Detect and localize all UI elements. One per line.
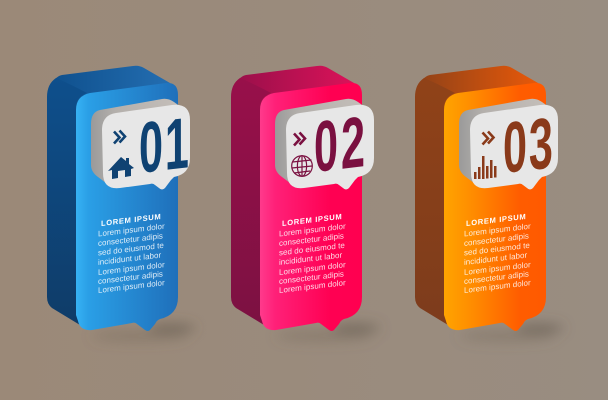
floor shadow (460, 323, 564, 342)
body text: consectetur adipis (464, 231, 529, 248)
body text: Lorem ipsum dolor (98, 260, 165, 277)
body text: Lorem ipsum dolor (279, 222, 346, 238)
body text: Lorem ipsum dolor (279, 260, 346, 277)
icon: chevrons (482, 132, 494, 144)
icon: house (108, 157, 134, 179)
body text: Lorem ipsum dolor (464, 222, 531, 238)
floor shadow (92, 323, 196, 342)
body text: incididunt ut labor (279, 251, 342, 267)
panel: step 01 (47, 66, 196, 342)
body text: sed do eiusmod te (98, 241, 164, 257)
top face (234, 66, 363, 120)
icon: chevrons (294, 132, 305, 146)
body text: consectetur adipis (98, 231, 163, 248)
front face (76, 83, 178, 331)
number: 02 (314, 100, 368, 188)
callout depth (459, 99, 556, 186)
front face (444, 83, 546, 331)
body text (98, 222, 165, 295)
body text: consectetur adipis (98, 269, 163, 286)
body text: Lorem ipsum dolor (464, 278, 531, 295)
panel: step 02 (231, 66, 380, 342)
callout face (102, 105, 190, 190)
body text: incididunt ut labor (98, 251, 161, 267)
front face (260, 83, 362, 331)
body text: Lorem ipsum dolor (98, 278, 165, 295)
body text: Lorem ipsum dolor (464, 260, 531, 277)
body text: Lorem ipsum dolor (98, 222, 165, 238)
number: 03 (503, 102, 555, 189)
icon: chevrons (114, 130, 125, 144)
callout depth (91, 99, 188, 186)
icon: bar chart (474, 156, 496, 179)
floor shadow (276, 323, 380, 342)
heading: LOREM IPSUM (282, 212, 342, 228)
top face (50, 66, 179, 120)
side face (415, 78, 455, 325)
side face (47, 78, 87, 325)
number: 01 (139, 102, 191, 189)
body text: incididunt ut labor (464, 251, 527, 267)
callout depth (275, 99, 372, 186)
body text: consectetur adipis (464, 269, 529, 286)
heading: LOREM IPSUM (466, 212, 526, 228)
panel: step 03 (415, 66, 564, 342)
body text: Lorem ipsum dolor (279, 278, 346, 295)
icon: globe (292, 156, 312, 176)
body text: consectetur adipis (279, 231, 344, 248)
callout face (470, 105, 558, 190)
heading: LOREM IPSUM (101, 212, 161, 228)
side face (231, 78, 271, 325)
body text: sed do eiusmod te (464, 241, 530, 257)
body text: consectetur adipis (279, 269, 344, 286)
body text: sed do eiusmod te (279, 241, 345, 257)
body text (279, 222, 346, 295)
body text (464, 222, 531, 295)
callout face (286, 105, 374, 190)
top face (418, 66, 547, 120)
